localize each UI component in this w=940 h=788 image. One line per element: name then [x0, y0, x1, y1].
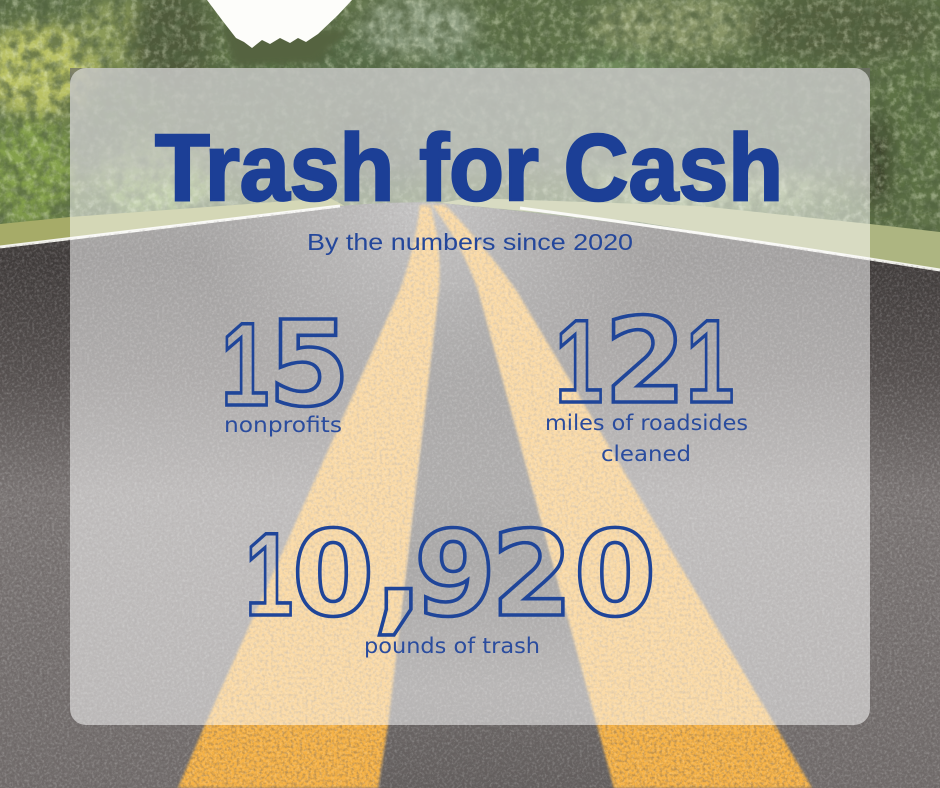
- sky opening: [207, 0, 352, 48]
- trees: [0, 0, 940, 275]
- number: 10,920: 0: [574, 505, 656, 643]
- subtitle: By the numbers since 2020: [307, 229, 633, 255]
- label: miles of roadsides cleaned: miles of roadsides: [545, 411, 748, 435]
- number: 15: 5: [268, 295, 350, 433]
- number: 10,920: 0: [292, 505, 374, 643]
- stat: 121 miles: [545, 292, 748, 466]
- distant tree line: [225, 30, 350, 66]
- translucent panel: [70, 68, 870, 725]
- label: miles of roadsides cleaned: cleaned: [601, 442, 691, 466]
- number: 121: 1: [686, 296, 734, 428]
- title: Trash for Cash: [155, 115, 783, 221]
- number: 121: 2: [604, 292, 686, 430]
- number: 10,920: ,: [372, 486, 425, 649]
- number: 10,920: 1: [245, 509, 293, 641]
- road surface: [0, 195, 940, 788]
- label: pounds of trash: pounds of trash: [364, 634, 540, 658]
- label: nonprofits: nonprofits: [224, 413, 342, 437]
- number: 15: 1: [221, 299, 269, 431]
- number: 121: 1: [555, 296, 603, 428]
- asphalt grit: [0, 195, 940, 788]
- dark centre strip: [380, 290, 614, 788]
- stat: 15 nonprofits: [221, 295, 350, 437]
- number: 10,920: 2: [491, 505, 573, 643]
- grass verges: [0, 198, 345, 248]
- misty forest behind panel: [70, 68, 870, 188]
- stat: 10,920 pounds: [245, 486, 656, 658]
- number: 10,920: 9: [414, 505, 496, 643]
- yellow centre lines: [178, 205, 812, 788]
- road edge lines: [0, 206, 340, 247]
